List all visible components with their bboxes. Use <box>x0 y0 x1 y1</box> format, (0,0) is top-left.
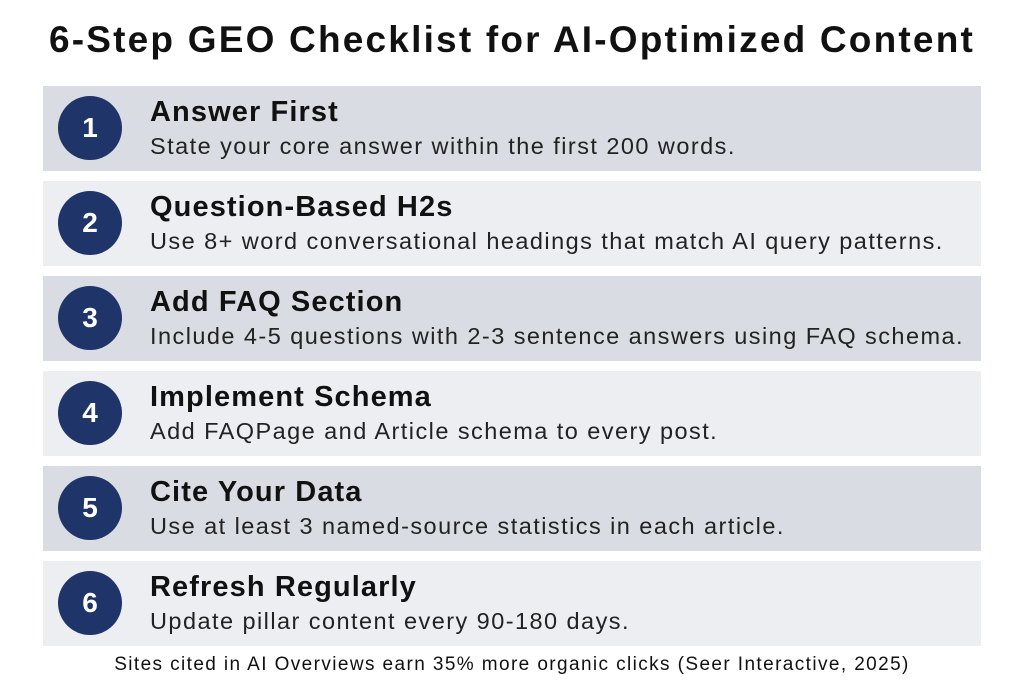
footer note: Sites cited in AI Overviews earn 35% more organic clicks (Seer Interactive, 2025) <box>114 654 910 675</box>
row 4: Add FAQPage and Article schema to every post. <box>150 418 718 444</box>
row 4: 4 <box>82 397 98 428</box>
row 5: Cite Your Data <box>150 476 363 508</box>
row 2 <box>43 181 981 266</box>
row 2: Question-Based H2s <box>150 191 453 223</box>
title: 6-Step GEO Checklist for AI-Optimized Content <box>49 19 975 60</box>
row 1: Answer First <box>150 96 339 128</box>
row 4: Implement Schema <box>150 381 432 413</box>
row 5: Use at least 3 named-source statistics in each article. <box>150 513 785 539</box>
row 1 <box>43 86 981 171</box>
row 6 <box>43 561 981 646</box>
row 6: Refresh Regularly <box>150 571 417 603</box>
row 3: 3 <box>82 302 98 333</box>
row 6: Update pillar content every 90-180 days. <box>150 608 630 634</box>
row 5 <box>43 466 981 551</box>
row 4 <box>43 371 981 456</box>
row 1: 1 <box>82 112 98 143</box>
row 3: Add FAQ Section <box>150 286 403 318</box>
row 2: 2 <box>82 207 98 238</box>
row 6: 6 <box>82 587 98 618</box>
row 5: 5 <box>82 492 98 523</box>
row 1: State your core answer within the first 200 words. <box>150 133 736 159</box>
row 3: Include 4-5 questions with 2-3 sentence answers using FAQ schema. <box>150 323 964 349</box>
row 2: Use 8+ word conversational headings that match AI query patterns. <box>150 228 944 254</box>
row 3 <box>43 276 981 361</box>
